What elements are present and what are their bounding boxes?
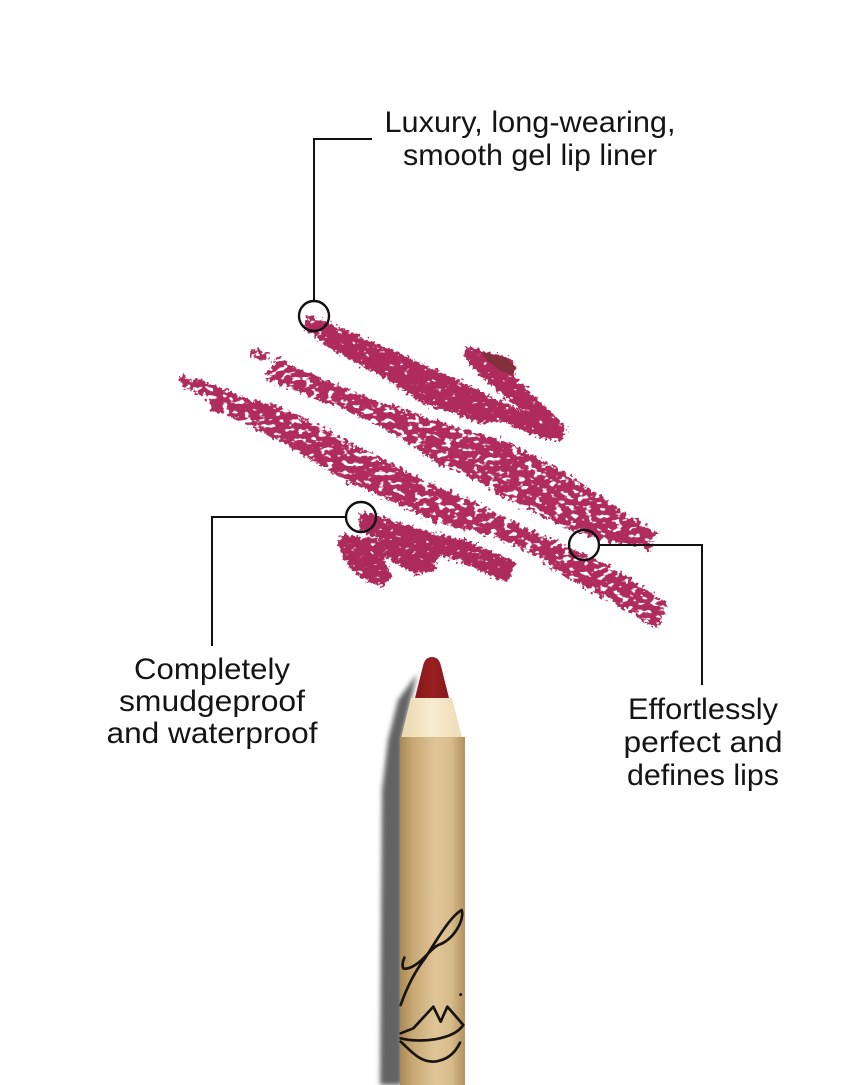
icon: signature and lips logo [401, 910, 463, 1062]
callout: luxury gel lip liner [299, 106, 676, 331]
callout leader line [314, 139, 372, 301]
pencil shadow [380, 674, 417, 1085]
pencil lead tip [415, 657, 449, 698]
callout text: Completely [134, 653, 290, 686]
callout text: and waterproof [106, 717, 318, 750]
callout marker circle [569, 530, 599, 560]
lip liner swatch scribble [178, 316, 668, 627]
callout: effortlessly perfect [569, 530, 782, 792]
callout text: perfect and [624, 726, 782, 759]
callout text: defines lips [627, 759, 779, 792]
callout text: Effortlessly [628, 693, 778, 726]
callout text: Luxury, long-wearing, [384, 106, 676, 139]
pencil wood cone [401, 698, 462, 738]
swatch stroke: second line [250, 348, 658, 550]
callout leader line [599, 545, 702, 685]
swatch stroke: short lower lines [337, 512, 517, 588]
callout marker circle [299, 301, 329, 331]
pencil gold barrel [400, 737, 465, 1085]
callout marker circle [346, 502, 376, 532]
swatch stroke: upper hairpin [304, 316, 567, 442]
swatch: dark colour residue [480, 352, 515, 375]
lip liner pencil [400, 657, 465, 1085]
callout leader line [212, 517, 346, 646]
callout text: smudgeproof [119, 685, 306, 718]
swatch stroke: third long line [178, 375, 668, 627]
callout text: smooth gel lip liner [403, 139, 657, 172]
callout: smudgeproof and waterproof [106, 502, 376, 750]
